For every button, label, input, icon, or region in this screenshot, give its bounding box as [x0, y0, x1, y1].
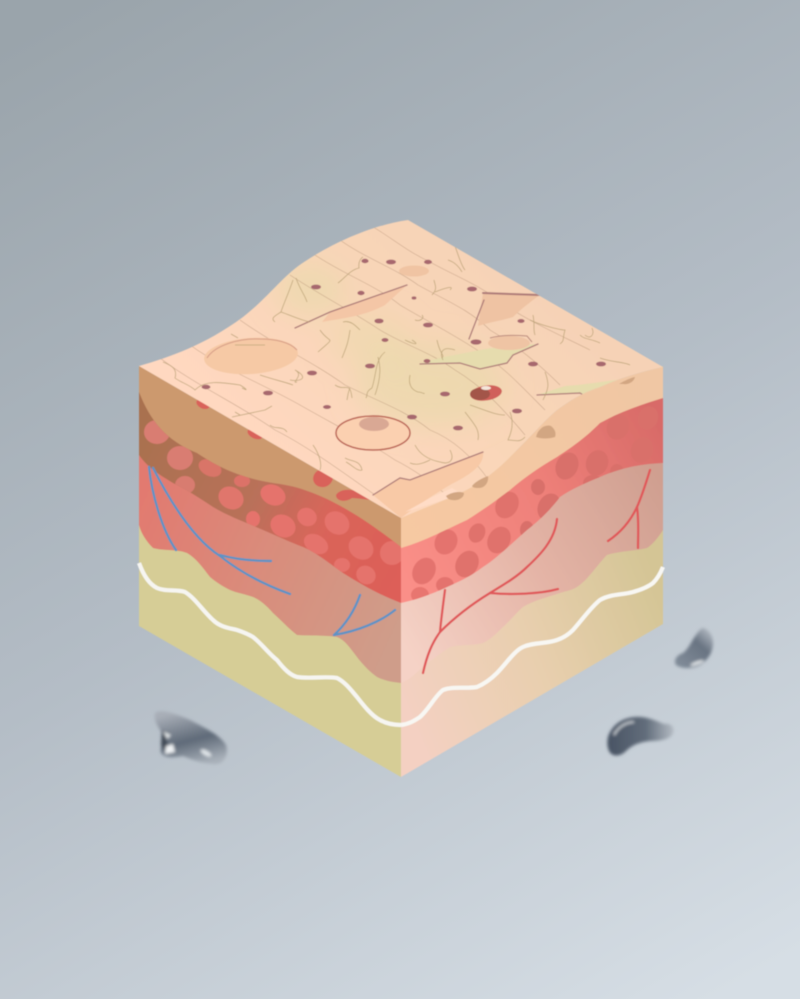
- right face: red band: [401, 398, 663, 603]
- right face layers: [401, 366, 663, 777]
- left face: dark mottled band: [139, 392, 401, 603]
- right face: peach outer layer: [401, 367, 663, 560]
- surface: pigment patches: [322, 285, 635, 518]
- surface: small peach patches: [399, 266, 429, 276]
- surface: pore dots: [202, 259, 606, 430]
- stone: right upper: [675, 628, 713, 668]
- top skin surface: [139, 220, 663, 518]
- left face: blue veins: [149, 467, 395, 635]
- surface: red lesion: [470, 384, 502, 402]
- right face: pink dermis: [401, 430, 663, 683]
- left face: white membrane line: [139, 563, 401, 725]
- left face: red blobs at surface edge: [195, 397, 376, 501]
- surface: fine wrinkle lines: [160, 225, 590, 498]
- skin cube: [139, 220, 663, 777]
- right face: base layer: [401, 366, 663, 777]
- stone: right lower: [607, 717, 674, 756]
- left face: tan outer layer: [139, 366, 401, 575]
- surface: large oval patch: [204, 338, 298, 374]
- surface: branching cracks: [163, 230, 630, 470]
- surface shape: [139, 220, 663, 518]
- surface: cut lines: [295, 285, 588, 495]
- surface: tan edge blobs: [446, 377, 635, 500]
- left face layers: [139, 366, 404, 777]
- left face: band follicle circles: [144, 420, 404, 588]
- right face: band follicle circles: [411, 451, 618, 600]
- left face: pink dermis: [139, 440, 401, 683]
- left face: yellow subcutaneous base: [139, 366, 401, 777]
- stone: lower left: [155, 711, 227, 764]
- surface: ringed oval lesion: [336, 416, 410, 450]
- right face: white membrane line: [401, 567, 663, 725]
- right face: red capillaries: [423, 470, 650, 673]
- surface: greenish tint patches: [287, 274, 488, 421]
